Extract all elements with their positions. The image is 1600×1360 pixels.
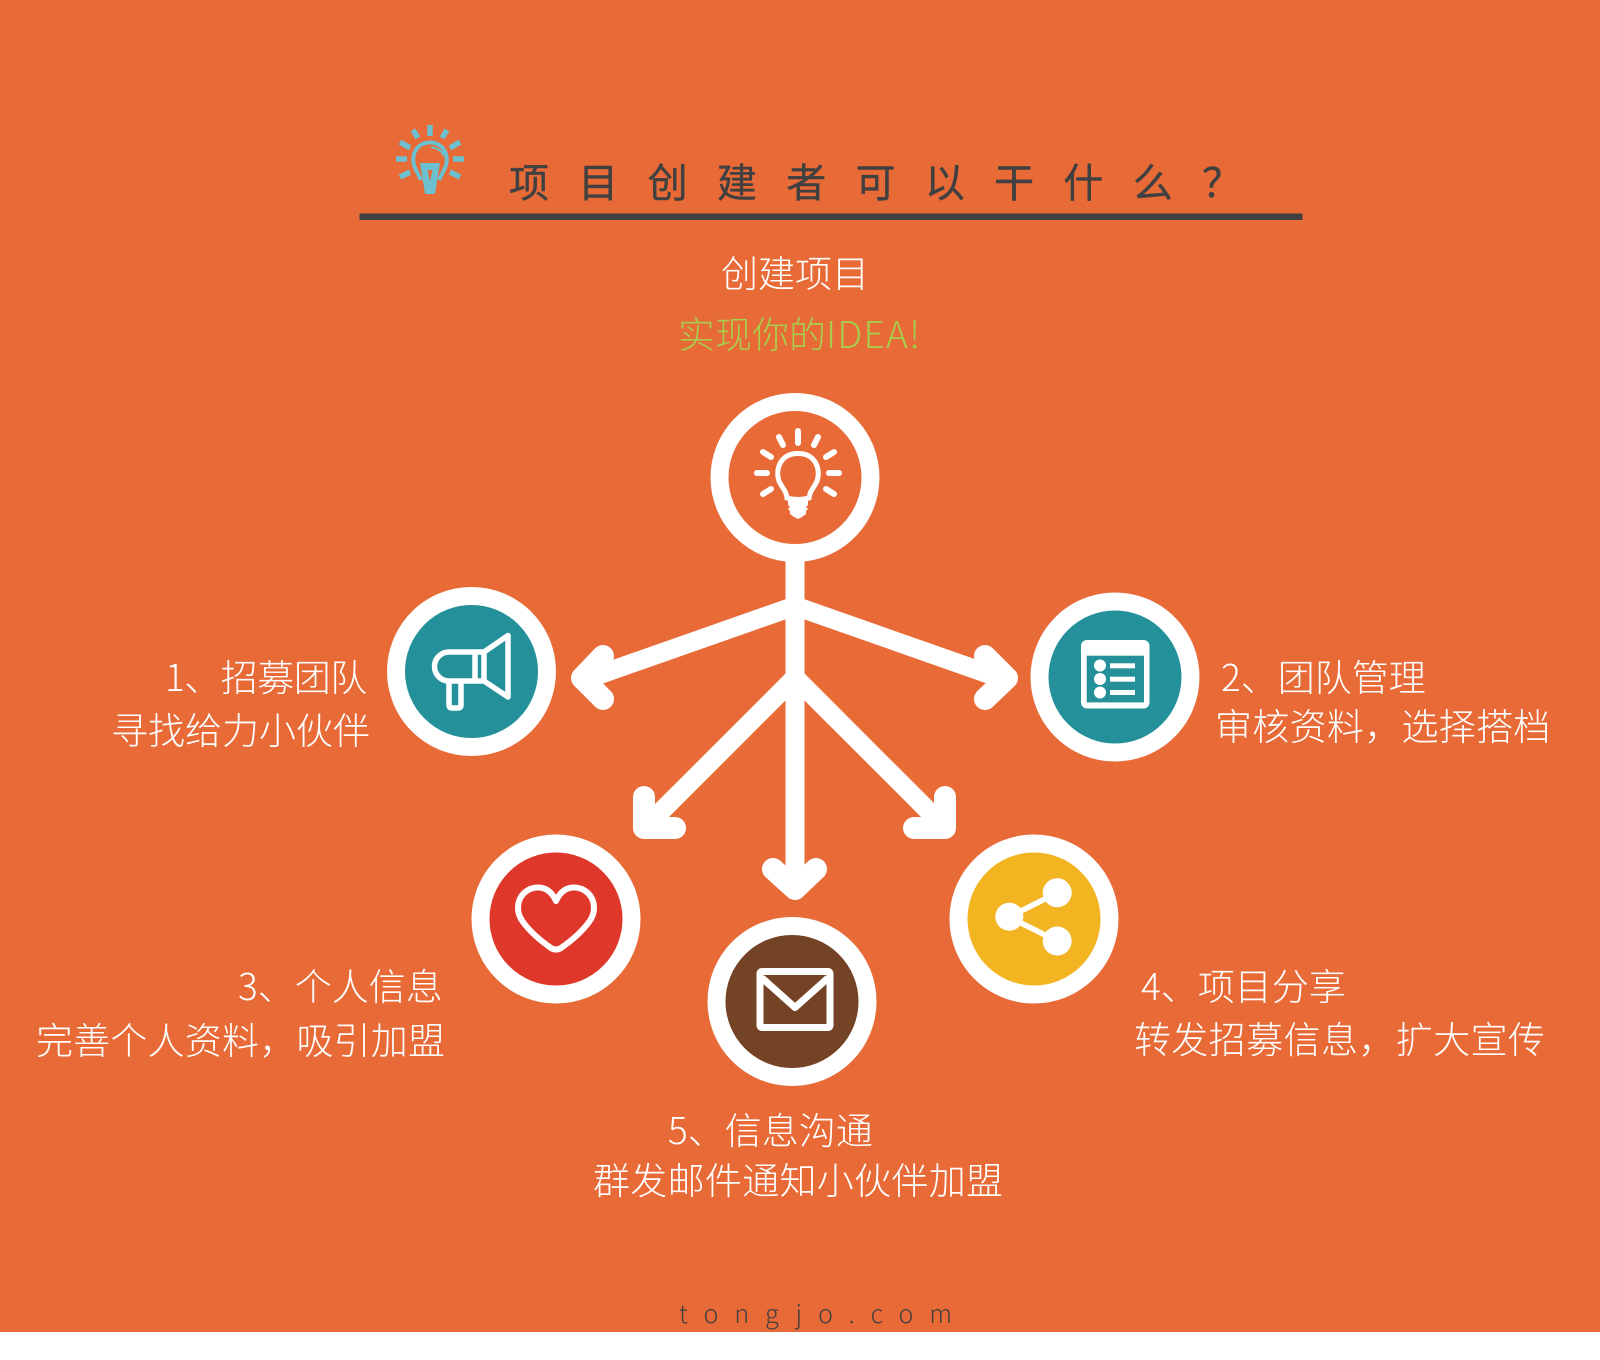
lower right arrow [795, 678, 940, 822]
icon: heart [518, 888, 594, 950]
text block: item 3 detail: 完善个人资料，吸引加盟 [36, 1011, 445, 1065]
text block: item 1 detail: 寻找给力小伙伴 [111, 701, 370, 755]
left arm arrow [590, 606, 795, 678]
icon: white light bulb [757, 431, 839, 519]
node 2: list [1040, 602, 1190, 752]
footer url: tongjo.com [679, 1295, 968, 1331]
text block: item 5: 5、信息沟通 [668, 1101, 873, 1155]
title: 项目创建者可以干什么？ [509, 151, 1271, 209]
icon: share [995, 878, 1072, 956]
right arm arrow [795, 606, 1000, 678]
node 5: mail [716, 926, 868, 1077]
subtitle: realize idea: 实现你的IDEA! [678, 305, 921, 359]
node 3: heart [480, 844, 632, 994]
heading underline [360, 214, 1302, 220]
subtitle: create project: 创建项目 [721, 244, 869, 298]
icon: megaphone [434, 636, 508, 708]
lower left arrow [650, 678, 795, 822]
text block: item 4 detail: 转发招募信息，扩大宣传 [1134, 1010, 1545, 1064]
text block: item 1: 1、招募团队 [165, 648, 367, 702]
text block: item 3: 3、个人信息 [238, 957, 443, 1011]
text block: item 5 detail: 群发邮件通知小伙伴加盟 [593, 1151, 1003, 1205]
text block: item 4: 4、项目分享 [1141, 957, 1346, 1011]
icon: envelope [760, 972, 830, 1028]
text block: item 2: 2、团队管理 [1221, 648, 1426, 702]
node 4: share [958, 844, 1110, 994]
stick figure with arrows [582, 555, 1007, 889]
icon: list card [1081, 640, 1150, 708]
stem and down arrow [786, 555, 804, 885]
text block: item 2 detail: 审核资料，选择搭档 [1215, 697, 1551, 751]
node 1: megaphone [396, 596, 547, 747]
head circle with idea bulb [720, 402, 870, 553]
icon: blue title light bulb [396, 125, 464, 194]
